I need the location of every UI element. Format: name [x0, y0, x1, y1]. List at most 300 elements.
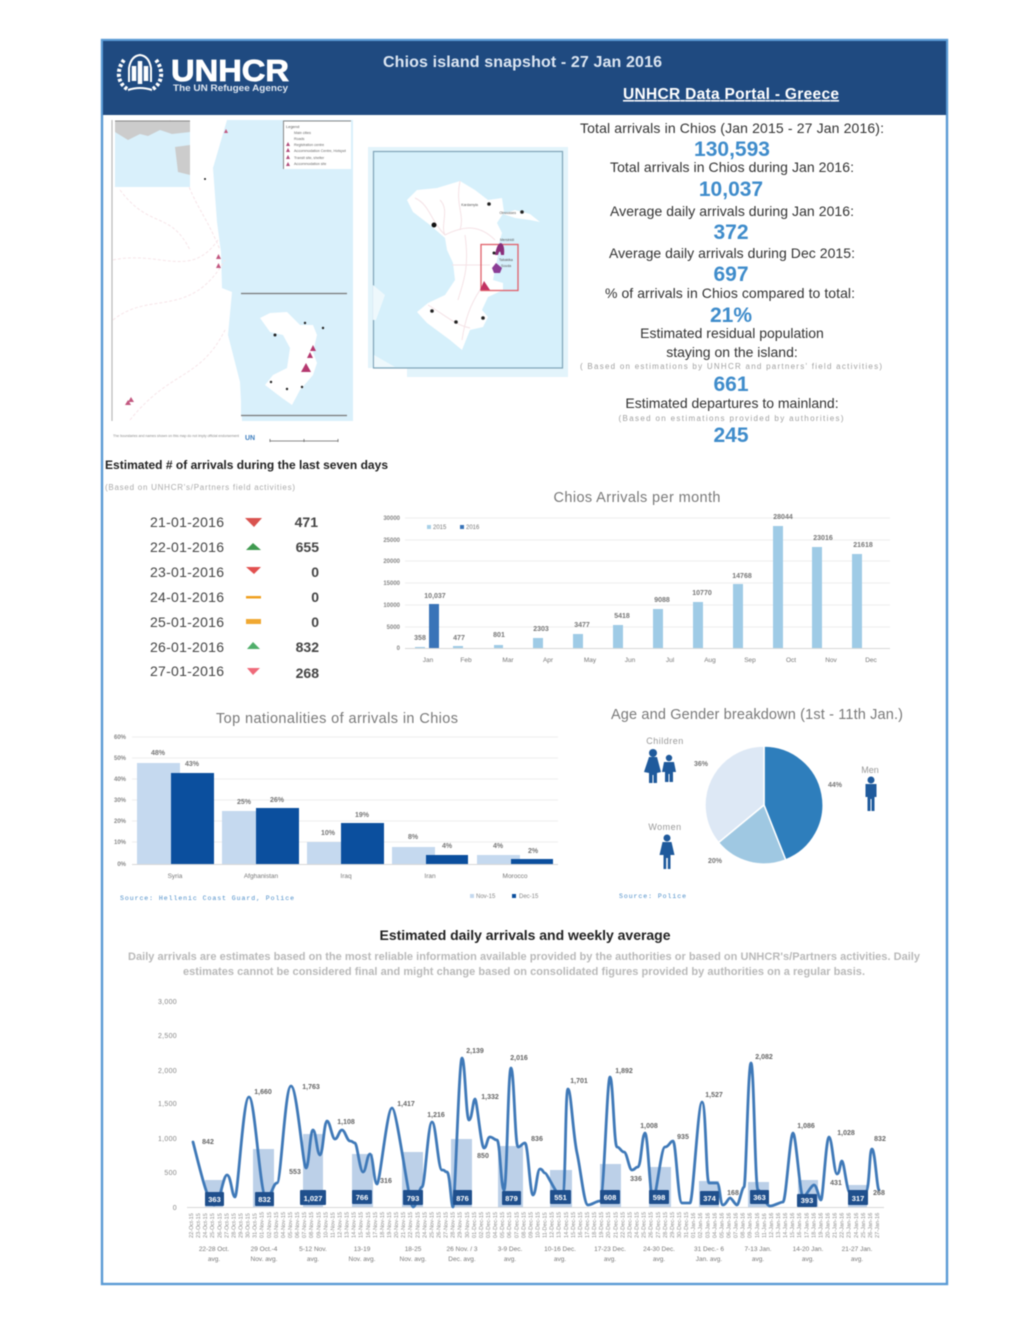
peak value labels: 1,892	[615, 1068, 633, 1075]
month labels: Oct	[786, 657, 796, 664]
weekly period labels: 26 Nov. / 3	[447, 1246, 478, 1253]
daily date labels: 02-Jan-16	[698, 1213, 704, 1238]
country labels: Syria	[168, 873, 183, 880]
weekly period labels: 18-25	[405, 1246, 422, 1253]
legend: Nov-15	[476, 894, 496, 900]
weekly average value boxes: 598	[653, 1193, 665, 1202]
value labels: 25%	[237, 799, 252, 806]
stat: total arrivals: Total arrivals in Chios (Jan 2015 - 27 Jan 2016):	[580, 120, 884, 136]
daily date labels: 03-Dec-15	[486, 1212, 492, 1238]
weekly period labels: avg.	[851, 1256, 863, 1263]
daily date labels: 14-Dec-15	[564, 1212, 570, 1238]
daily date labels: 14-Jan-16	[783, 1213, 789, 1238]
daily date labels: 14-Nov-15	[352, 1212, 358, 1238]
daily date labels: 07-Nov-15	[302, 1212, 308, 1238]
daily date labels: 06-Jan-16	[726, 1213, 732, 1238]
stat: Jan daily average: Average daily arrivals during Jan 2016:	[610, 203, 854, 219]
y axis labels	[158, 999, 177, 1212]
daily date labels: 05-Dec-15	[500, 1212, 506, 1238]
country labels: Iraq	[340, 873, 352, 880]
peak value labels: 2,016	[510, 1055, 528, 1062]
pie labels	[694, 761, 843, 865]
daily date labels: 16-Jan-16	[797, 1213, 803, 1238]
daily date labels: 09-Jan-16	[748, 1213, 754, 1238]
weekly period labels: 21-27 Jan.	[842, 1246, 873, 1253]
peak value labels: 1,008	[640, 1123, 658, 1130]
logo wordmark: UNHCR	[171, 53, 289, 88]
value: Dec daily average: 697	[713, 263, 749, 286]
row: 23-01-2016	[150, 564, 319, 580]
weekly period labels: 13-19	[354, 1246, 371, 1253]
y axis labels: 2,500	[158, 1033, 177, 1040]
weekly average value boxes: 374	[703, 1194, 717, 1203]
row: 23-01-2016: 23-01-2016	[150, 564, 224, 580]
weekly period labels: 7-13 Jan.	[744, 1246, 772, 1253]
note: residual source: ( Based on estimations by UNHCR and partners' field activities)	[580, 362, 882, 371]
daily date labels: 15-Nov-15	[359, 1212, 365, 1238]
daily date labels: 02-Nov-15	[267, 1212, 273, 1238]
y axis labels: 1,000	[158, 1136, 177, 1143]
peak value labels: 1,332	[481, 1094, 499, 1101]
stat: residual population line two: staying on the island:	[666, 344, 798, 360]
month labels: Feb	[460, 657, 472, 664]
label: children: Children	[646, 736, 684, 746]
daily date labels: 21-Nov-15	[401, 1212, 407, 1238]
icon: UNHCR emblem	[119, 55, 161, 90]
weekly period labels	[199, 1246, 873, 1263]
map footer and scale bar: UN	[245, 435, 255, 442]
weekly period labels: 5-12 Nov.	[299, 1246, 327, 1253]
value labels: 10,037	[424, 593, 446, 600]
y axis labels: 5000	[387, 625, 401, 631]
portal link: UNHCR Data Portal - Greece	[623, 86, 839, 103]
value labels: 10%	[321, 830, 336, 837]
y axis labels: 0	[173, 1205, 177, 1212]
daily date labels: 13-Jan-16	[776, 1213, 782, 1238]
weekly period labels: Nov. avg.	[251, 1256, 278, 1263]
value labels: 801	[493, 632, 505, 639]
weekly period labels: avg.	[802, 1256, 814, 1263]
daily date labels: 04-Nov-15	[281, 1212, 287, 1238]
daily date labels: 01-Dec-15	[472, 1212, 478, 1238]
peak value labels: 2,139	[466, 1048, 484, 1055]
map inset: Greece locator	[115, 121, 190, 187]
chart title: Age and Gender breakdown (1st - 11th Jan.)	[611, 707, 903, 723]
daily date labels: 18-Nov-15	[380, 1212, 386, 1238]
y axis labels: 10000	[383, 603, 401, 609]
weekly period labels: avg.	[504, 1256, 516, 1263]
peak value labels: 2,082	[755, 1054, 773, 1061]
peak value labels: 850	[477, 1153, 489, 1160]
daily date labels: 09-Dec-15	[528, 1212, 534, 1238]
peak value labels: 1,527	[705, 1092, 723, 1099]
map: Chios island	[368, 147, 568, 377]
bars: Dec-15	[171, 773, 553, 864]
daily date labels: 27-Nov-15	[444, 1212, 450, 1238]
bars	[415, 526, 862, 648]
y axis labels: 500	[164, 1170, 177, 1177]
daily date labels	[189, 1212, 881, 1238]
y axis labels: 2,000	[158, 1068, 177, 1075]
weekly period labels: avg.	[554, 1256, 566, 1263]
map legend: Main cities	[294, 131, 311, 135]
peak value labels: 935	[677, 1134, 689, 1141]
y axis labels: 30000	[383, 516, 401, 522]
row: 27-01-2016	[150, 663, 319, 681]
map legend	[283, 121, 351, 169]
chart: arrivals per month	[383, 490, 890, 664]
daily date labels: 26-Oct-15	[217, 1213, 223, 1238]
value labels: 43%	[185, 761, 200, 768]
daily date labels: 17-Nov-15	[373, 1212, 379, 1238]
daily date labels: 23-Oct-15	[196, 1213, 202, 1238]
page frame	[102, 40, 947, 1284]
daily date labels: 29-Dec-15	[670, 1212, 676, 1238]
daily date labels: 19-Dec-15	[599, 1212, 605, 1238]
daily date labels: 28-Dec-15	[663, 1212, 669, 1238]
chart title: Top nationalities of arrivals in Chios	[216, 711, 458, 727]
legend: 2015	[433, 525, 447, 531]
chart title: Chios Arrivals per month	[554, 490, 720, 506]
row: 23-01-2016: 0	[311, 564, 319, 580]
daily date labels: 13-Dec-15	[557, 1212, 563, 1238]
daily date labels: 22-Jan-16	[840, 1213, 846, 1238]
stat: Dec daily average: Average daily arrivals during Dec 2015:	[609, 245, 855, 261]
peak value labels: 842	[202, 1139, 214, 1146]
daily date labels: 04-Dec-15	[493, 1212, 499, 1238]
peak value labels: 1,417	[397, 1101, 415, 1108]
daily date labels: 25-Nov-15	[429, 1212, 435, 1238]
daily arrivals line	[193, 1058, 879, 1207]
country labels: Morocco	[503, 873, 528, 880]
daily date labels: 07-Dec-15	[514, 1212, 520, 1238]
map legend: Transit site, shelter	[294, 156, 325, 160]
y axis labels: 1,500	[158, 1101, 177, 1108]
peak value labels: 316	[380, 1178, 392, 1185]
peak value labels	[202, 1048, 886, 1197]
weekly period labels: 10-16 Dec.	[544, 1246, 576, 1253]
month labels: Mar	[502, 657, 514, 664]
y axis labels: 40%	[114, 777, 127, 783]
weekly period labels: Jan. avg.	[696, 1256, 722, 1263]
weekly average value boxes: 876	[456, 1194, 469, 1203]
peak value labels: 836	[531, 1136, 543, 1143]
daily date labels: 19-Nov-15	[387, 1212, 393, 1238]
value labels: 14768	[732, 573, 752, 580]
header band	[103, 41, 946, 115]
note: daily arrivals line one: Daily arrivals are estimates based on the most reliable information available provided by the authorities or based on UNHCR's/Partners activities. Daily	[128, 951, 921, 963]
peak value labels: 336	[630, 1176, 642, 1183]
y axis labels: 60%	[114, 735, 127, 741]
y axis labels: 30%	[114, 798, 127, 804]
daily date labels: 13-Nov-15	[345, 1212, 351, 1238]
value labels: 4%	[442, 843, 453, 850]
row: 24-01-2016	[150, 589, 319, 605]
weekly period labels: Nov. avg.	[349, 1256, 376, 1263]
daily date labels: 24-Dec-15	[634, 1212, 640, 1238]
daily date labels: 03-Nov-15	[274, 1212, 280, 1238]
weekly average value boxes	[205, 1190, 868, 1207]
daily date labels: 12-Nov-15	[338, 1212, 344, 1238]
daily date labels: 20-Nov-15	[394, 1212, 400, 1238]
legend: Dec-15	[519, 894, 539, 900]
value labels: 4%	[493, 843, 504, 850]
weekly period labels: Dec. avg.	[448, 1256, 476, 1263]
daily date labels: 28-Oct-15	[231, 1213, 237, 1238]
daily date labels: 29-Nov-15	[458, 1212, 464, 1238]
value: total arrivals: 130,593	[694, 138, 770, 161]
daily date labels: 10-Jan-16	[755, 1213, 761, 1238]
row: 21-01-2016: 471	[295, 514, 318, 530]
icon: woman	[660, 834, 674, 869]
daily date labels: 08-Nov-15	[309, 1212, 315, 1238]
heading: daily arrivals: Estimated daily arrivals and weekly average	[380, 927, 671, 943]
value labels: 8%	[408, 834, 419, 841]
row: 21-01-2016: 21-01-2016	[150, 514, 224, 530]
daily date labels: 15-Jan-16	[790, 1213, 796, 1238]
daily date labels: 23-Jan-16	[847, 1213, 853, 1238]
peak value labels: 1,028	[837, 1130, 855, 1137]
month labels: Apr	[543, 657, 554, 664]
chart: top nationalities	[114, 711, 558, 902]
row: 22-01-2016	[150, 539, 319, 555]
weekly average value boxes: 832	[258, 1195, 271, 1204]
map: Chios island: Kardamyla	[461, 203, 478, 207]
peak value labels: 553	[289, 1169, 301, 1176]
daily date labels: 07-Jan-16	[734, 1213, 740, 1238]
note: daily arrivals line two: estimates cannot be considered final and might change based on consolidated figures provided by authorities on a regular basis.	[183, 966, 865, 978]
daily date labels: 27-Jan-16	[875, 1213, 881, 1238]
value labels: 2%	[528, 848, 539, 855]
daily date labels: 24-Oct-15	[203, 1213, 209, 1238]
value labels: 26%	[270, 797, 285, 804]
y axis labels: 20%	[114, 819, 127, 825]
daily date labels: 26-Dec-15	[649, 1212, 655, 1238]
daily date labels: 23-Nov-15	[415, 1212, 421, 1238]
weekly average value boxes: 879	[505, 1194, 518, 1203]
weekly period labels: avg.	[653, 1256, 665, 1263]
row: 25-01-2016: 0	[311, 614, 319, 630]
panel: key figures	[580, 120, 884, 447]
country labels	[168, 873, 528, 880]
row: 22-01-2016: 22-01-2016	[150, 539, 224, 555]
daily date labels: 01-Jan-16	[691, 1213, 697, 1238]
daily date labels: 10-Dec-15	[536, 1212, 542, 1238]
weekly average value boxes: 363	[208, 1195, 221, 1204]
y axis labels: 10%	[114, 840, 127, 846]
label: women: Women	[648, 822, 682, 832]
stat: residual population: Estimated residual population	[640, 325, 824, 341]
daily date labels: 23-Dec-15	[628, 1212, 634, 1238]
heading: last seven days: Estimated # of arrivals during the last seven days	[105, 458, 388, 472]
value: Jan arrivals: 10,037	[699, 178, 763, 201]
icon: children	[644, 749, 676, 783]
weekly average value boxes: 317	[852, 1194, 864, 1203]
weekly average value boxes: 608	[604, 1193, 616, 1202]
value labels	[151, 750, 539, 855]
value labels: 21618	[853, 542, 873, 549]
row: 24-01-2016: 24-01-2016	[150, 589, 224, 605]
peak value labels: 1,086	[797, 1123, 815, 1130]
peak value labels: 1,108	[337, 1119, 355, 1126]
daily date labels: 12-Dec-15	[550, 1212, 556, 1238]
weekly average value boxes: 551	[554, 1193, 567, 1202]
source note: Source: Hellenic Coast Guard, Police	[120, 895, 294, 902]
daily date labels: 30-Oct-15	[246, 1213, 252, 1238]
stat: Jan arrivals: Total arrivals in Chios during Jan 2016:	[610, 159, 854, 175]
daily date labels: 17-Jan-16	[804, 1213, 810, 1238]
daily date labels: 03-Jan-16	[705, 1213, 711, 1238]
bars: Nov-15	[137, 763, 520, 864]
row: 24-01-2016: 0	[311, 589, 319, 605]
map legend: Legend	[286, 124, 299, 129]
panel: last seven days	[105, 458, 388, 681]
daily date labels: 08-Jan-16	[741, 1213, 747, 1238]
daily date labels: 27-Oct-15	[224, 1213, 230, 1238]
daily date labels: 29-Oct-15	[238, 1213, 244, 1238]
daily date labels: 16-Dec-15	[578, 1212, 584, 1238]
weekly period labels: avg.	[208, 1256, 220, 1263]
map legend: Registration centre	[294, 143, 324, 147]
icon: man	[866, 776, 876, 811]
value: departures: 245	[713, 424, 749, 447]
label: men: Men	[861, 765, 879, 775]
value labels: 3477	[574, 622, 590, 629]
value labels: 5418	[614, 613, 630, 620]
map: Chios island: Oinousses	[499, 211, 516, 215]
daily date labels: 24-Jan-16	[854, 1213, 860, 1238]
value labels: 48%	[151, 750, 166, 757]
weekly average bars	[205, 1134, 867, 1207]
daily date labels: 25-Jan-16	[861, 1213, 867, 1238]
weekly average value boxes: 793	[407, 1194, 419, 1203]
value labels: 358	[414, 635, 426, 642]
month labels: May	[584, 657, 597, 664]
stat: share of total: % of arrivals in Chios compared to total:	[605, 285, 855, 301]
peak value labels: 1,660	[254, 1089, 272, 1096]
daily date labels: 11-Nov-15	[330, 1212, 336, 1238]
y axis labels: 25000	[383, 538, 401, 544]
y axis labels	[114, 735, 127, 868]
legend	[427, 525, 480, 531]
daily date labels: 06-Dec-15	[507, 1212, 513, 1238]
weekly period labels: 3-9 Dec.	[498, 1246, 522, 1253]
map: Chios island: Mersinidi	[500, 238, 514, 242]
month labels: Dec	[865, 657, 878, 664]
row: 22-01-2016: 655	[296, 539, 319, 555]
daily date labels: 30-Dec-15	[677, 1212, 683, 1238]
peak value labels: 832	[874, 1136, 886, 1143]
pie labels: 20%	[708, 858, 723, 865]
daily date labels: 11-Jan-16	[762, 1213, 768, 1238]
daily date labels: 05-Nov-15	[288, 1212, 294, 1238]
daily date labels: 25-Oct-15	[210, 1213, 216, 1238]
value labels: 10770	[692, 590, 712, 597]
map: Chios island: Tabakika	[499, 258, 513, 262]
peak value labels: 168	[727, 1190, 739, 1197]
weekly period labels: 14-20 Jan.	[793, 1246, 824, 1253]
daily date labels: 28-Nov-15	[451, 1212, 457, 1238]
daily date labels: 24-Nov-15	[422, 1212, 428, 1238]
daily date labels: 12-Jan-16	[769, 1213, 775, 1238]
daily date labels: 26-Jan-16	[868, 1213, 874, 1238]
weekly period labels: 29 Oct.-4	[251, 1246, 278, 1253]
pie labels: 44%	[828, 782, 843, 789]
row: 26-01-2016	[150, 639, 319, 655]
y axis labels	[383, 516, 401, 652]
value labels: 19%	[355, 812, 370, 819]
weekly period labels: avg.	[307, 1256, 319, 1263]
daily date labels: 02-Dec-15	[479, 1212, 485, 1238]
daily date labels: 30-Nov-15	[465, 1212, 471, 1238]
map footer and scale bar: The boundaries and names shown on this map do not imply official endorsement	[113, 434, 239, 438]
weekly period labels: 22-28 Oct.	[199, 1246, 229, 1253]
row: 27-01-2016: 27-01-2016	[150, 663, 224, 679]
daily date labels: 27-Dec-15	[656, 1212, 662, 1238]
month labels	[423, 657, 878, 664]
daily date labels: 09-Nov-15	[316, 1212, 322, 1238]
month labels: Nov	[825, 657, 838, 664]
daily date labels: 31-Oct-15	[253, 1213, 259, 1238]
weekly average value boxes: 766	[356, 1193, 368, 1202]
weekly period labels: avg.	[752, 1256, 764, 1263]
month labels: Jul	[666, 657, 675, 664]
note: departures source: (Based on estimations provided by authorities)	[618, 414, 844, 423]
value: residual population: 661	[713, 373, 749, 396]
y axis labels: 3,000	[158, 999, 177, 1006]
weekly period labels: Nov. avg.	[400, 1256, 427, 1263]
chart: daily arrivals and weekly average	[158, 999, 886, 1263]
value labels: 23016	[813, 535, 833, 542]
y axis labels: 0	[397, 646, 401, 652]
row: 26-01-2016: 832	[296, 639, 319, 655]
stat: departures: Estimated departures to mainland:	[625, 395, 839, 411]
weekly period labels: avg.	[604, 1256, 616, 1263]
daily date labels: 20-Dec-15	[606, 1212, 612, 1238]
daily date labels: 21-Jan-16	[833, 1213, 839, 1238]
country labels: Iran	[424, 873, 436, 880]
row: 25-01-2016: 25-01-2016	[150, 614, 224, 630]
legend: 2016	[466, 525, 480, 531]
map legend: Roads	[294, 137, 305, 141]
row: 21-01-2016	[150, 514, 318, 530]
value labels: 477	[453, 635, 465, 642]
peak value labels: 431	[830, 1180, 842, 1187]
month labels: Sep	[744, 657, 756, 664]
daily date labels: 01-Nov-15	[260, 1212, 266, 1238]
daily date labels: 25-Dec-15	[642, 1212, 648, 1238]
daily date labels: 22-Nov-15	[408, 1212, 414, 1238]
daily date labels: 16-Nov-15	[366, 1212, 372, 1238]
y axis labels: 50%	[114, 756, 127, 762]
note: seven days source: (Based on UNHCR's/Partners field activities)	[105, 483, 295, 492]
weekly average value boxes: 1,027	[304, 1194, 322, 1203]
row: 26-01-2016: 26-01-2016	[150, 639, 224, 655]
daily date labels: 18-Dec-15	[592, 1212, 598, 1238]
daily date labels: 21-Dec-15	[613, 1212, 619, 1238]
daily date labels: 20-Jan-16	[826, 1213, 832, 1238]
daily date labels: 15-Dec-15	[571, 1212, 577, 1238]
value labels: 28044	[773, 514, 793, 521]
map: regional overview	[112, 120, 353, 421]
daily date labels: 18-Jan-16	[811, 1213, 817, 1238]
month labels: Aug	[704, 657, 716, 664]
weekly period labels: 17-23 Dec.	[594, 1246, 626, 1253]
daily date labels: 06-Nov-15	[295, 1212, 301, 1238]
peak value labels: 1,701	[570, 1078, 588, 1085]
chart: age and gender	[611, 707, 903, 900]
source note: Source: Police	[619, 893, 686, 900]
